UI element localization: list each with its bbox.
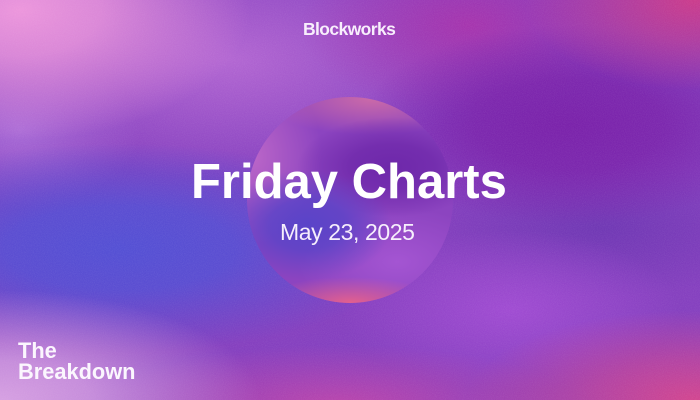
logo: Blockworks: Blockworks: [303, 19, 395, 39]
date: May 23, 2025: [280, 219, 415, 245]
brand label: The Breakdown: [18, 338, 136, 384]
brand label: The Breakdown: The: [18, 338, 57, 363]
brand label: The Breakdown: Breakdown: [18, 359, 136, 384]
title: Friday Charts: [191, 155, 507, 209]
circle: [247, 97, 453, 303]
